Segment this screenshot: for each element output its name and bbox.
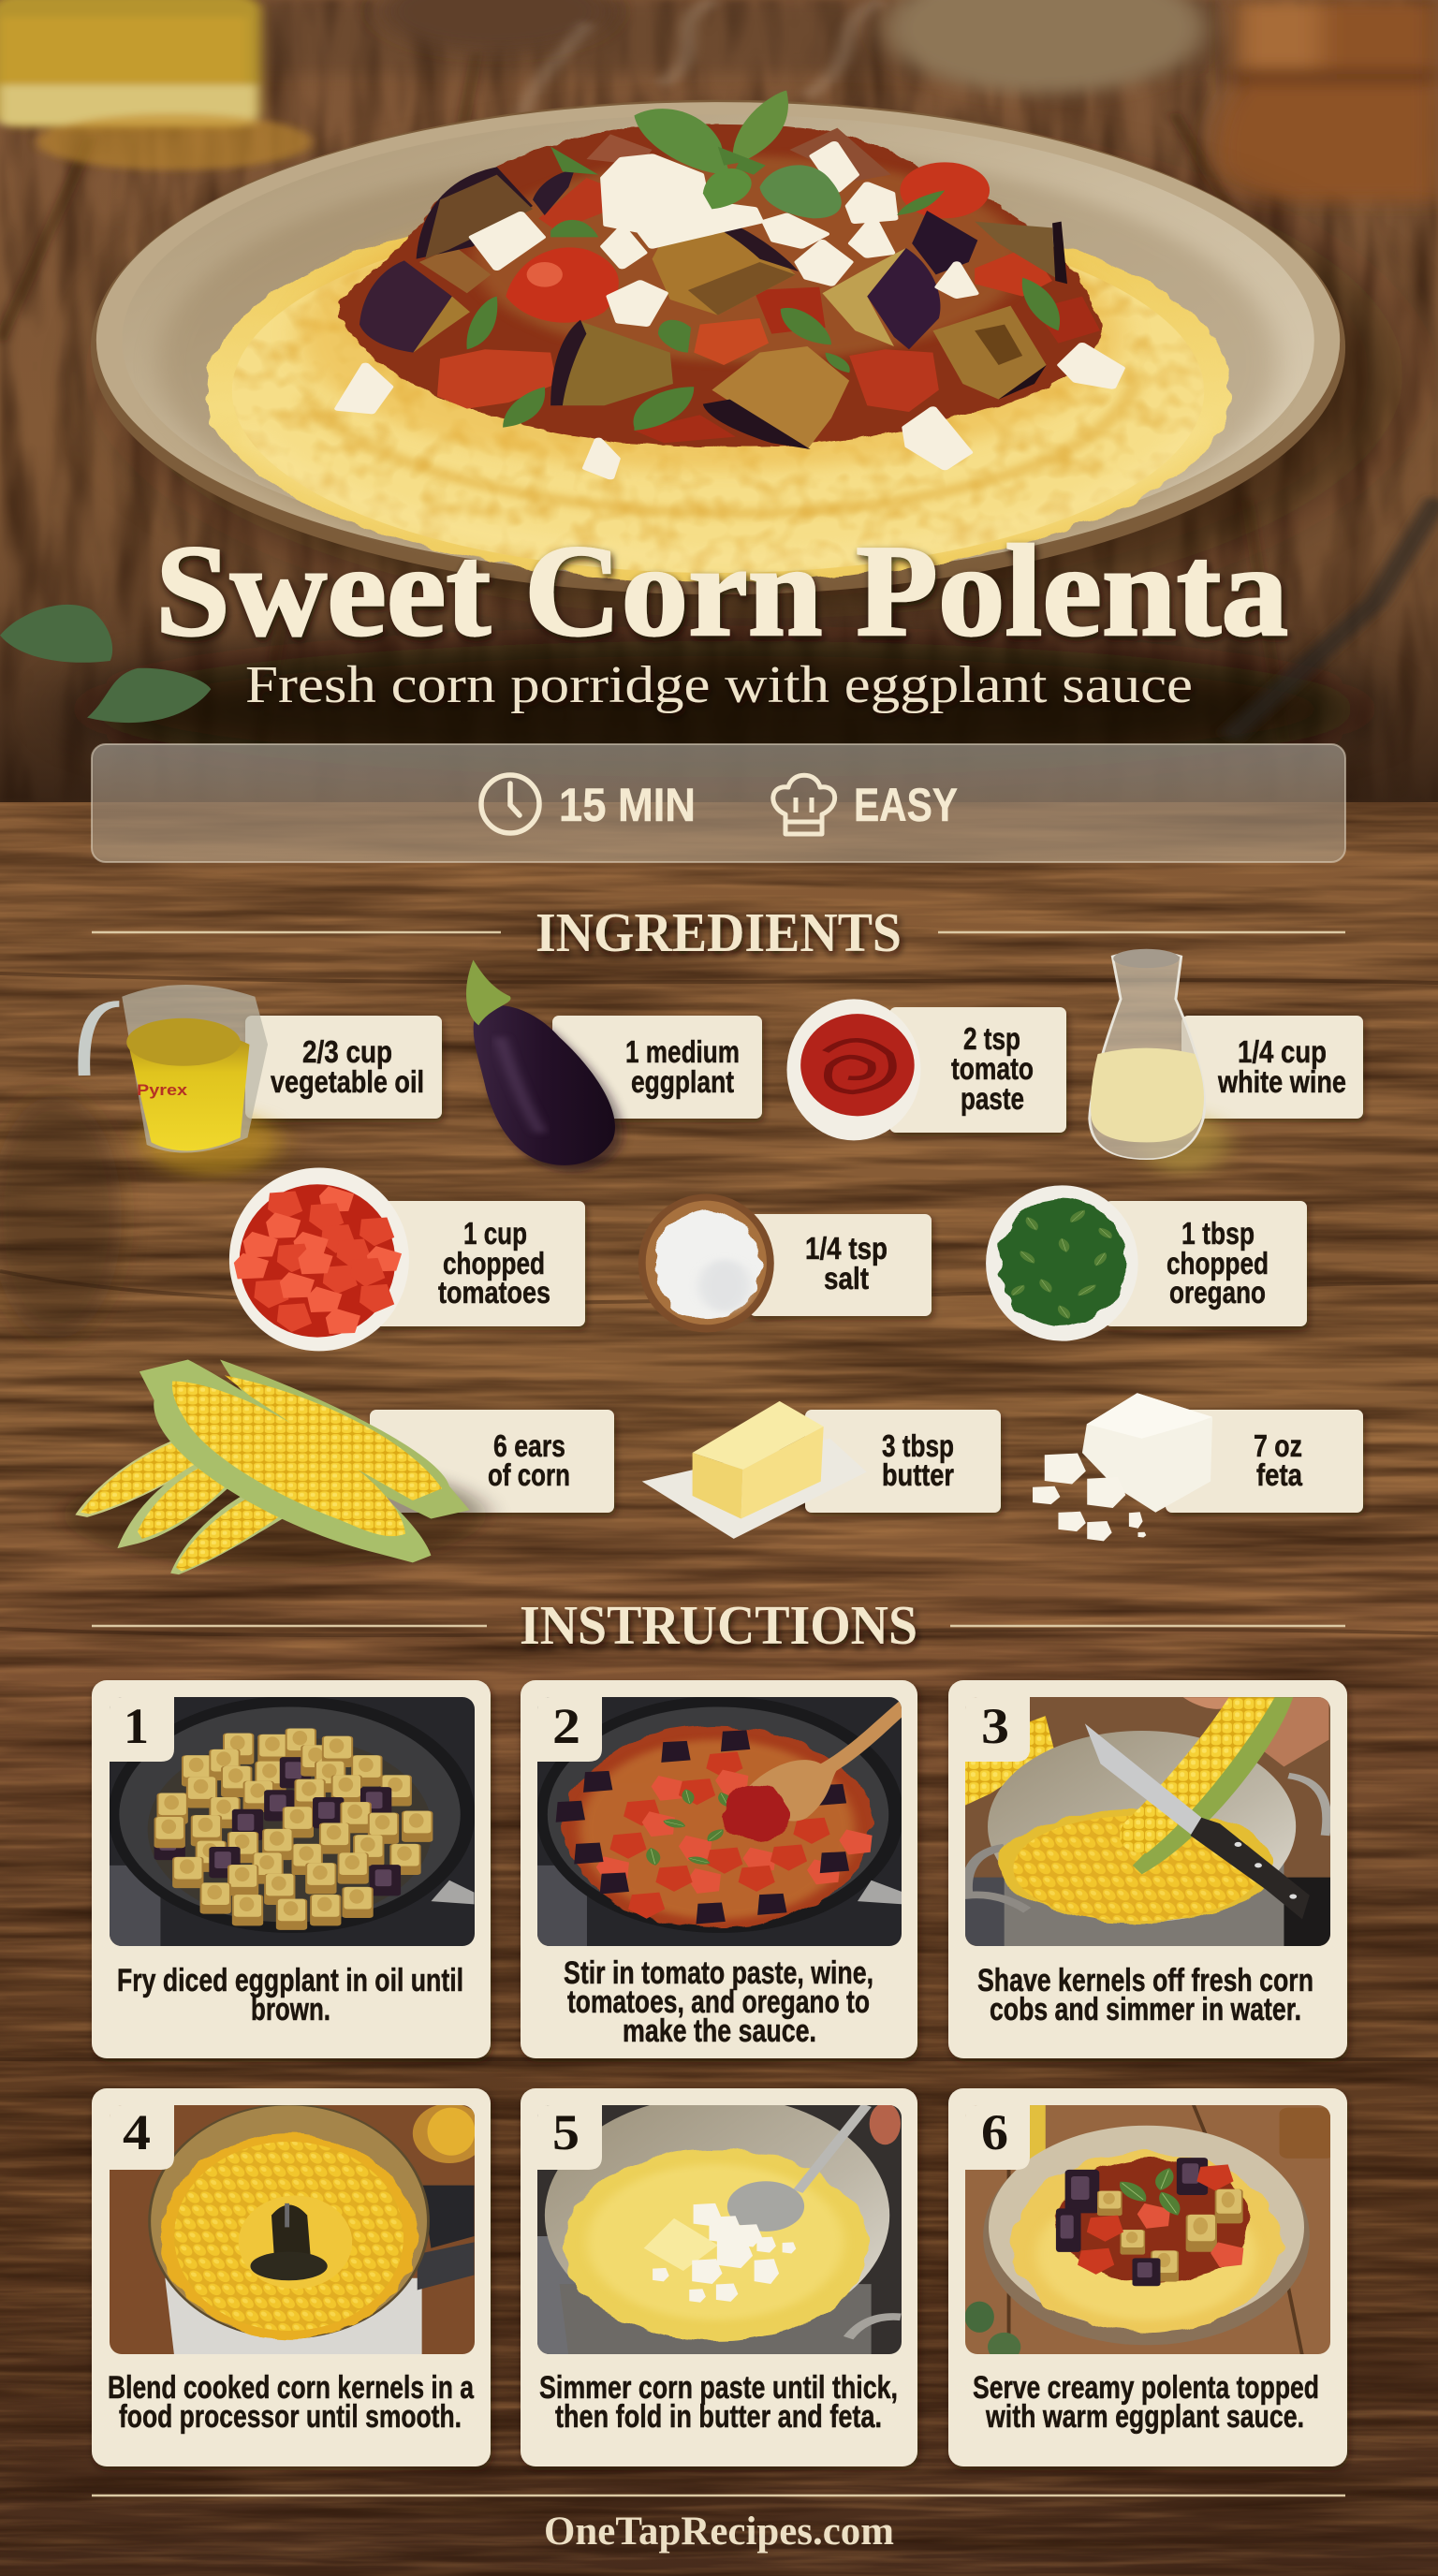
step text: then fold in butter and feta. bbox=[555, 2399, 882, 2435]
quantity: chopped bbox=[443, 1246, 545, 1281]
eggplant chunks bbox=[360, 167, 1067, 449]
status bar: time and difficulty bbox=[92, 744, 1345, 862]
quantity bbox=[438, 1216, 550, 1310]
hero bottom fade bbox=[0, 599, 1438, 802]
step text: food processor until smooth. bbox=[119, 2399, 462, 2435]
quantity bbox=[488, 1428, 570, 1492]
quantity: feta bbox=[1256, 1457, 1303, 1492]
icon: chef hat bbox=[773, 775, 835, 834]
quantity: tomatoes bbox=[438, 1275, 550, 1310]
quantity bbox=[951, 1021, 1034, 1116]
subtitle: Fresh corn porridge with eggplant sauce bbox=[245, 656, 1193, 714]
step number bbox=[537, 1697, 602, 1762]
quantity: oregano bbox=[1169, 1275, 1266, 1310]
quantity bbox=[271, 1034, 424, 1099]
ingredient: chopped tomatoes bbox=[229, 1167, 585, 1351]
ingredient: oregano bbox=[986, 1185, 1307, 1341]
blurred bowls in background bbox=[381, 0, 1206, 94]
heading: ingredients: INGREDIENTS bbox=[536, 901, 902, 963]
title: Sweet Corn Polenta bbox=[155, 519, 1288, 664]
quantity bbox=[882, 1428, 954, 1492]
step text bbox=[977, 1963, 1313, 2027]
cup brand: Pyrex bbox=[137, 1081, 188, 1099]
toppings: sauce, eggplant, tomato, feta, oregano bbox=[339, 91, 1121, 477]
photo: shaving corn into pot bbox=[959, 1695, 1334, 1949]
ingredient: corn bbox=[65, 1360, 614, 1574]
step number: 4 bbox=[123, 2104, 151, 2160]
quantity: 2/3 cup bbox=[302, 1034, 392, 1069]
ingredient: butter bbox=[642, 1401, 1001, 1539]
quantity: 3 tbsp bbox=[882, 1428, 954, 1463]
step number: 6 bbox=[981, 2104, 1008, 2160]
plate shadow bbox=[119, 130, 1403, 619]
step 6 card bbox=[948, 2088, 1347, 2466]
quantity: 7 oz bbox=[1254, 1428, 1302, 1463]
icon: feta block and crumbs bbox=[1033, 1393, 1212, 1541]
quantity: 2 tsp bbox=[963, 1021, 1020, 1056]
ingredient: feta bbox=[1033, 1393, 1363, 1541]
step number: 5 bbox=[552, 2104, 580, 2160]
step 4 card bbox=[92, 2088, 491, 2466]
icon: clock bbox=[481, 775, 539, 833]
photo: blending corn bbox=[106, 2101, 486, 2359]
quantity bbox=[1217, 1034, 1346, 1099]
step text bbox=[108, 2370, 475, 2435]
step number: 2 bbox=[552, 1698, 580, 1754]
quantity: salt bbox=[824, 1261, 869, 1295]
blurred glass of oil bbox=[0, 0, 312, 170]
quantity: 1/4 cup bbox=[1238, 1034, 1327, 1069]
quantity: eggplant bbox=[631, 1064, 734, 1099]
step text: brown. bbox=[251, 1992, 330, 2027]
quantity: 1 cup bbox=[463, 1216, 527, 1251]
step text bbox=[973, 2370, 1319, 2435]
quantity: 1/4 tsp bbox=[805, 1231, 888, 1266]
photo: tomato sauce in pan bbox=[532, 1695, 908, 1949]
icon: eggplant bbox=[466, 960, 623, 1172]
quantity: vegetable oil bbox=[271, 1064, 424, 1099]
polenta bbox=[205, 236, 1232, 582]
step text: Shave kernels off fresh corn bbox=[977, 1963, 1313, 1998]
photo: folding butter and feta bbox=[532, 2096, 908, 2359]
icon: tomato bowl bbox=[229, 1167, 409, 1351]
step text: Serve creamy polenta topped bbox=[973, 2370, 1319, 2406]
icon: ears of corn bbox=[65, 1360, 486, 1574]
ingredient: tomato paste bbox=[786, 999, 1066, 1140]
step text: Simmer corn paste until thick, bbox=[539, 2370, 898, 2406]
footer: OneTapRecipes.com bbox=[544, 2510, 894, 2554]
step 1 card bbox=[92, 1680, 491, 2058]
icon: wine carafe bbox=[1090, 949, 1229, 1174]
photo: served polenta bbox=[959, 2101, 1334, 2362]
quantity: butter bbox=[882, 1457, 954, 1492]
step number bbox=[965, 2104, 1030, 2170]
step text: make the sauce. bbox=[623, 2013, 816, 2049]
step text bbox=[539, 2370, 898, 2435]
pepper mill bbox=[1212, 0, 1438, 201]
quantity bbox=[1254, 1428, 1303, 1492]
steam bbox=[513, 0, 884, 113]
icon: oregano bowl bbox=[986, 1185, 1138, 1341]
icon: tomato paste bowl bbox=[786, 999, 921, 1140]
step number bbox=[110, 2104, 174, 2170]
hero photo: polenta plate on table bbox=[0, 0, 1438, 802]
quantity: of corn bbox=[488, 1457, 570, 1492]
step text: tomatoes, and oregano to bbox=[567, 1984, 870, 2020]
step text bbox=[117, 1963, 463, 2027]
step number bbox=[965, 1697, 1030, 1762]
icon: salt bowl bbox=[638, 1194, 774, 1332]
quantity: white wine bbox=[1217, 1064, 1346, 1099]
step 3 card bbox=[948, 1680, 1347, 2058]
heading: instructions: INSTRUCTIONS bbox=[520, 1594, 917, 1656]
quantity: paste bbox=[961, 1081, 1024, 1116]
quantity: 1 tbsp bbox=[1181, 1216, 1255, 1251]
step text: Fry diced eggplant in oil until bbox=[117, 1963, 463, 1998]
feta crumbles bbox=[339, 143, 1121, 477]
step text: cobs and simmer in water. bbox=[990, 1992, 1301, 2027]
plate bbox=[91, 100, 1345, 594]
tomato pieces bbox=[419, 128, 1100, 443]
ingredient: white wine bbox=[1090, 949, 1363, 1174]
quantity: 6 ears bbox=[493, 1428, 565, 1463]
step 2 card bbox=[521, 1680, 917, 2058]
quantity: chopped bbox=[1167, 1246, 1269, 1281]
step number bbox=[110, 1697, 174, 1762]
step number: 1 bbox=[124, 1698, 149, 1754]
sauce bbox=[339, 124, 1101, 446]
quantity bbox=[805, 1231, 888, 1295]
step 5 card bbox=[521, 2088, 917, 2466]
step number: 3 bbox=[981, 1698, 1009, 1754]
hero table wood bbox=[0, 0, 1438, 802]
photo: frying eggplant bbox=[106, 1695, 477, 1949]
oregano garnish bbox=[466, 91, 1060, 431]
step text: with warm eggplant sauce. bbox=[985, 2399, 1304, 2435]
quantity: 1 medium bbox=[625, 1034, 740, 1069]
quantity bbox=[1167, 1216, 1269, 1310]
step text bbox=[564, 1955, 873, 2049]
difficulty label: EASY bbox=[854, 779, 958, 831]
fork bbox=[1229, 499, 1438, 738]
quantity bbox=[625, 1034, 740, 1099]
icon: butter stick on paper bbox=[642, 1401, 867, 1539]
title shade bbox=[82, 641, 1367, 777]
step text: Blend cooked corn kernels in a bbox=[108, 2370, 475, 2406]
quantity: tomato bbox=[951, 1051, 1034, 1086]
scattered oregano leaves bbox=[0, 605, 211, 723]
ingredient: vegetable oil bbox=[84, 985, 442, 1176]
step text: Stir in tomato paste, wine, bbox=[564, 1955, 873, 1991]
icon: measuring cup bbox=[84, 985, 280, 1176]
ingredient: salt bbox=[638, 1194, 932, 1332]
page background: wood bbox=[0, 802, 1438, 2576]
ingredient: eggplant bbox=[466, 960, 762, 1172]
time label: 15 MIN bbox=[559, 779, 696, 831]
step number bbox=[537, 2104, 602, 2170]
